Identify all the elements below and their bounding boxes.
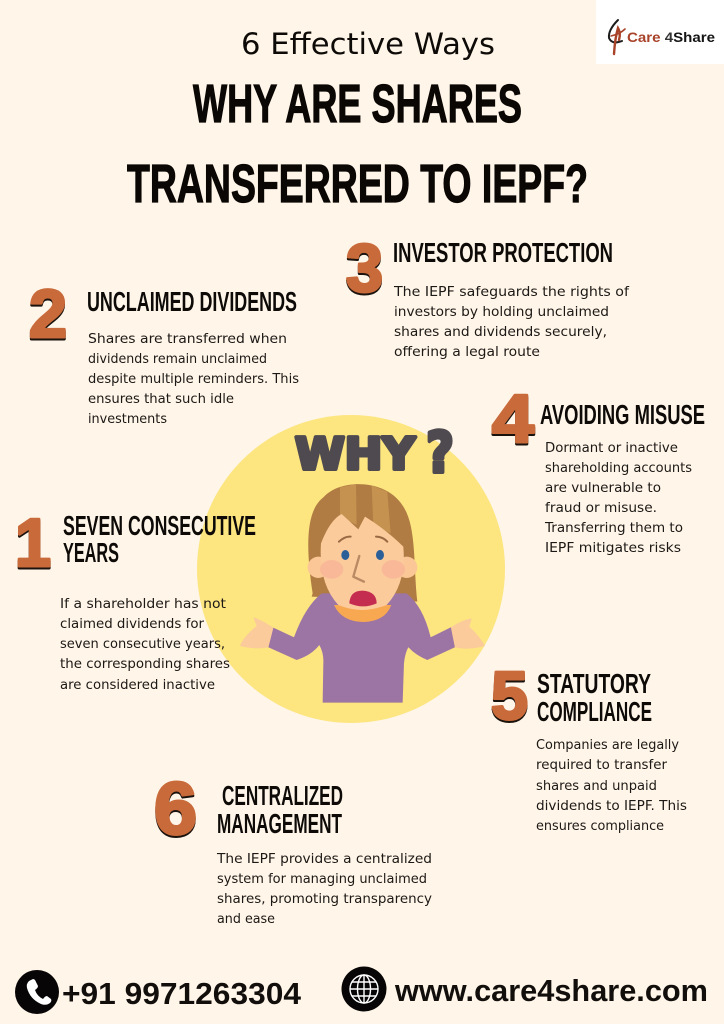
website url: www.care4share.com xyxy=(394,973,708,1008)
number 4: 4 xyxy=(492,381,534,457)
body text: investments xyxy=(88,411,167,427)
body text: shareholding accounts xyxy=(545,460,692,476)
number 6: 6 xyxy=(154,767,197,850)
heading xyxy=(537,668,652,727)
title group xyxy=(127,27,588,214)
main title line 1: WHY ARE SHARES xyxy=(193,74,522,134)
body text: ensures compliance xyxy=(536,818,664,834)
body text: dividends remain unclaimed xyxy=(88,351,267,367)
heading: UNCLAIMED DIVIDENDS xyxy=(87,286,297,317)
body text: system for managing unclaimed xyxy=(217,871,427,887)
heading: STATUTORY xyxy=(537,668,651,699)
body text: shares and unpaid xyxy=(536,778,657,794)
number 3: 3 xyxy=(346,232,383,308)
illustration: yellow circle with worried woman xyxy=(197,415,505,723)
WHY? lettering xyxy=(295,421,454,486)
icon: phone xyxy=(15,970,59,1014)
heading xyxy=(217,780,343,839)
number 2: 2 xyxy=(29,276,67,352)
number 1: 1 xyxy=(15,507,51,583)
body text: If a shareholder has not xyxy=(60,596,226,612)
footer: phone contact xyxy=(15,970,302,1014)
heading: YEARS xyxy=(63,537,119,568)
panel: 1 seven consecutive years xyxy=(15,505,256,693)
logo icon xyxy=(609,20,625,54)
yellow circle xyxy=(197,415,505,723)
body text: required to transfer xyxy=(536,757,667,773)
logo text: Care 4Share xyxy=(627,29,715,45)
logo: Care4Share xyxy=(596,0,724,64)
body text: are vulnerable to xyxy=(545,480,661,496)
body text: ensures that such idle xyxy=(88,391,234,407)
number 2: 2 xyxy=(29,278,67,354)
heading: CENTRALIZED xyxy=(222,780,343,811)
body text: Shares are transferred when xyxy=(88,331,287,347)
number 4: 4 xyxy=(492,383,534,459)
woman figure xyxy=(240,484,485,703)
panel: 4 avoiding misuse xyxy=(492,381,705,556)
body text: investors by holding unclaimed xyxy=(394,304,609,320)
number 5: 5 xyxy=(491,660,528,736)
body text: offering a legal route xyxy=(394,344,540,360)
body text: Companies are legally xyxy=(536,737,679,753)
WHY? lettering: WHY xyxy=(295,429,416,480)
heading: MANAGEMENT xyxy=(217,808,342,839)
number 3: 3 xyxy=(346,230,383,306)
body text: are considered inactive xyxy=(60,677,215,693)
body text xyxy=(88,331,299,427)
footer: website xyxy=(342,966,708,1012)
phone number: +91 9971263304 xyxy=(62,976,302,1011)
body text: shares, promoting transparency xyxy=(217,891,432,907)
number 6: 6 xyxy=(154,769,197,852)
body text: The IEPF safeguards the rights of xyxy=(393,284,630,300)
WHY? lettering: ? xyxy=(426,421,454,486)
body text: the corresponding shares xyxy=(60,656,230,672)
body text: The IEPF provides a centralized xyxy=(216,851,432,867)
panel: 3 investor protection xyxy=(346,230,630,360)
body text xyxy=(216,851,432,927)
body text: and ease xyxy=(217,911,275,927)
body text: Transferring them to xyxy=(544,520,683,536)
body text xyxy=(393,284,630,360)
subtitle: 6 Effective Ways xyxy=(241,27,495,61)
body text: dividends to IEPF. This xyxy=(536,798,687,814)
heading: INVESTOR PROTECTION xyxy=(393,237,613,268)
body text xyxy=(544,440,692,556)
body text: fraud or misuse. xyxy=(545,500,657,516)
body text: despite multiple reminders. This xyxy=(88,371,299,387)
panel: 2 unclaimed dividends xyxy=(29,276,299,427)
icon: globe xyxy=(342,966,386,1012)
number 1: 1 xyxy=(15,505,51,581)
body text: claimed dividends for xyxy=(60,616,204,632)
heading: COMPLIANCE xyxy=(537,696,652,727)
body text: shares and dividends securely, xyxy=(394,324,607,340)
body text xyxy=(60,596,230,693)
heading: SEVEN CONSECUTIVE xyxy=(63,510,256,541)
number 5: 5 xyxy=(491,658,528,734)
body text xyxy=(536,737,687,834)
body text: seven consecutive years, xyxy=(60,636,225,652)
panel: 5 statutory compliance xyxy=(491,658,687,834)
body text: IEPF mitigates risks xyxy=(545,540,681,556)
panel: 6 centralized management xyxy=(154,767,432,927)
heading xyxy=(63,510,256,568)
body text: Dormant or inactive xyxy=(545,440,678,456)
